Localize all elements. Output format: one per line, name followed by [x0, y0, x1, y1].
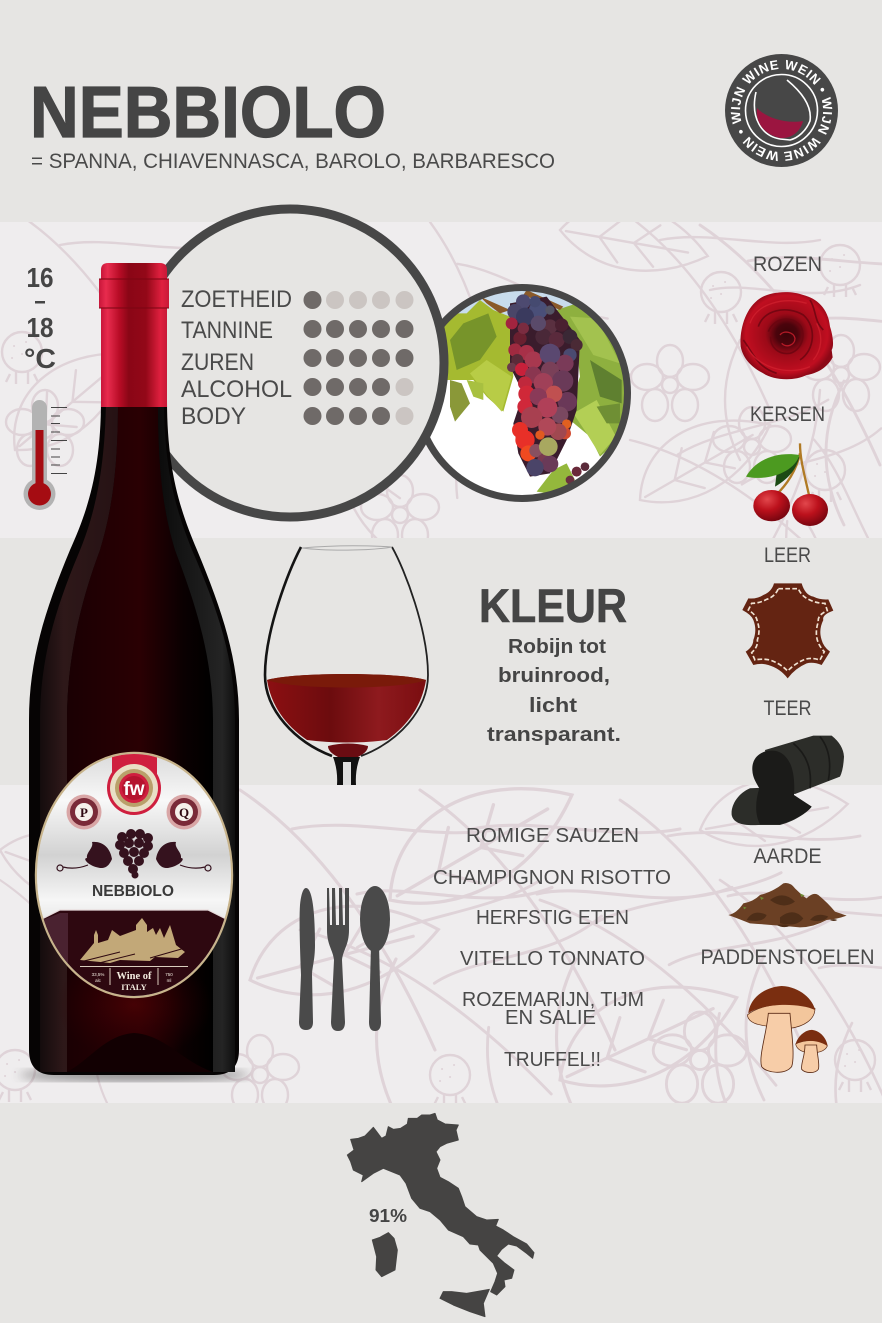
label footer: Wine of — [116, 971, 152, 982]
icon: tar barrel — [732, 736, 844, 825]
aroma label: leer: LEER — [764, 544, 811, 567]
serving temperature: 16 — [26, 262, 54, 293]
label grape emblem — [57, 829, 211, 878]
map: italy — [347, 1113, 534, 1317]
label footer: 33,5% — [92, 972, 104, 977]
colour description: transparant. — [487, 723, 621, 746]
aroma label: rozen: ROZEN — [753, 253, 822, 276]
glass bowl — [265, 547, 332, 756]
icon: grape photo circle — [416, 287, 630, 498]
grape leaves — [443, 290, 630, 495]
label badge Q — [166, 794, 202, 830]
icon: cherries — [746, 443, 828, 526]
food pairing list: CHAMPIGNON RISOTTO — [433, 866, 671, 889]
food pairing list — [433, 824, 671, 1071]
label footer — [80, 966, 188, 992]
aroma label: paddenstoelen: PADDENSTOELEN — [700, 946, 874, 969]
taste labels: BODY — [181, 403, 246, 430]
aroma label: kersen: KERSEN — [750, 403, 825, 426]
label vineyard illustration — [80, 918, 185, 964]
heading: kleur: KLEUR — [479, 579, 627, 632]
map percentage: 91% — [369, 1205, 407, 1226]
label footer: ITALY — [121, 982, 147, 992]
icon: rose — [740, 292, 833, 379]
food pairing list: ROMIGE SAUZEN — [466, 824, 639, 847]
bottle capsule — [99, 263, 169, 407]
colour description: licht — [529, 694, 577, 717]
grape cluster — [506, 294, 589, 484]
icon: soil — [728, 883, 847, 927]
label medallion: fw — [123, 779, 145, 800]
wine glass — [265, 546, 428, 785]
subtitle: synonyms: = SPANNA, CHIAVENNASCA, BAROLO, BARBARESCO — [31, 150, 555, 173]
colour description: Robijn tot — [508, 635, 606, 658]
taste labels — [181, 286, 292, 430]
panel: taste profile circle — [136, 209, 444, 517]
label name: NEBBIOLO — [92, 883, 174, 900]
logo: wine badge: WEIN • WIJN WINE WEIN • WIJN WINE — [730, 60, 832, 162]
panel: pattern band bottom — [0, 785, 882, 1103]
food pairing list: VITELLO TONNATO — [460, 947, 645, 970]
food pairing list: HERFSTIG ETEN — [476, 906, 629, 929]
colour description: bruinrood, — [498, 664, 610, 687]
icon: leather — [742, 583, 833, 678]
taste labels: ALCOHOL — [181, 376, 292, 403]
label badge P: P — [80, 805, 88, 820]
panel: pattern band top — [0, 222, 882, 538]
serving temperature: °C — [24, 343, 56, 374]
glass wine — [267, 674, 426, 742]
icon: mushrooms — [747, 986, 828, 1073]
taste labels: TANNINE — [181, 317, 273, 344]
taste labels: ZOETHEID — [181, 286, 292, 313]
label medallion — [107, 761, 161, 815]
title: NEBBIOLO — [30, 73, 386, 153]
food pairing list: ROZEMARIJN, TIJM — [462, 988, 644, 1011]
label footer: 750 — [165, 972, 173, 977]
label badge P — [66, 794, 102, 830]
rating dots — [304, 291, 414, 425]
aroma label: teer: TEER — [764, 697, 812, 720]
icon: thermometer — [24, 400, 67, 510]
serving temperature — [24, 262, 56, 374]
serving temperature: 18 — [26, 312, 54, 343]
food pairing list: EN SALIE — [505, 1006, 596, 1029]
taste labels: ZUREN — [181, 349, 254, 376]
label badge Q: Q — [179, 805, 189, 820]
bottle glass — [29, 400, 239, 1075]
aroma label: aarde: AARDE — [754, 845, 822, 868]
colour description — [487, 635, 621, 746]
glass stem — [333, 757, 360, 785]
icon: cutlery — [299, 886, 390, 1031]
bottle label — [30, 750, 240, 1000]
label footer: alc — [95, 978, 102, 983]
wine bottle — [19, 263, 249, 1081]
food pairing list: TRUFFEL!! — [504, 1048, 601, 1071]
label footer: ml — [167, 978, 171, 983]
bottle shadow — [19, 1069, 249, 1081]
